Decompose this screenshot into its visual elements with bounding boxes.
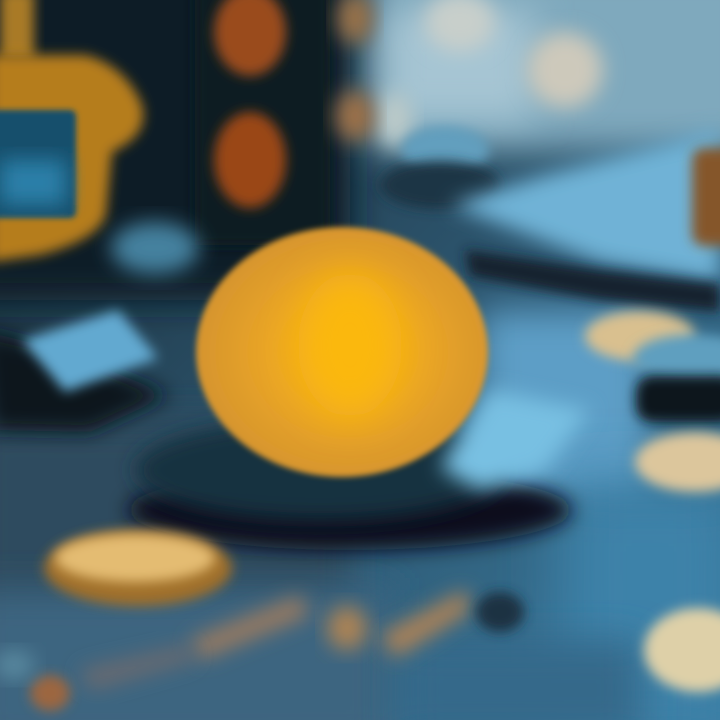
small coin lower left (44, 530, 232, 606)
dark column with orange ovals (195, 0, 375, 245)
coin stack at right (585, 311, 720, 492)
icon: small cup on top right (380, 126, 500, 209)
gold bottle shape (0, 0, 143, 262)
small blue tile (111, 222, 199, 274)
dark dot (476, 592, 524, 632)
dark plate under coin (128, 390, 590, 550)
top right light panels (377, 0, 603, 148)
coin lower right (644, 608, 720, 692)
orange streaks on the surface (0, 590, 472, 711)
light blue plate and dark edge (450, 130, 720, 312)
gold coin (196, 227, 488, 477)
left blue chip (0, 310, 170, 432)
brown object at right edge (692, 148, 720, 246)
